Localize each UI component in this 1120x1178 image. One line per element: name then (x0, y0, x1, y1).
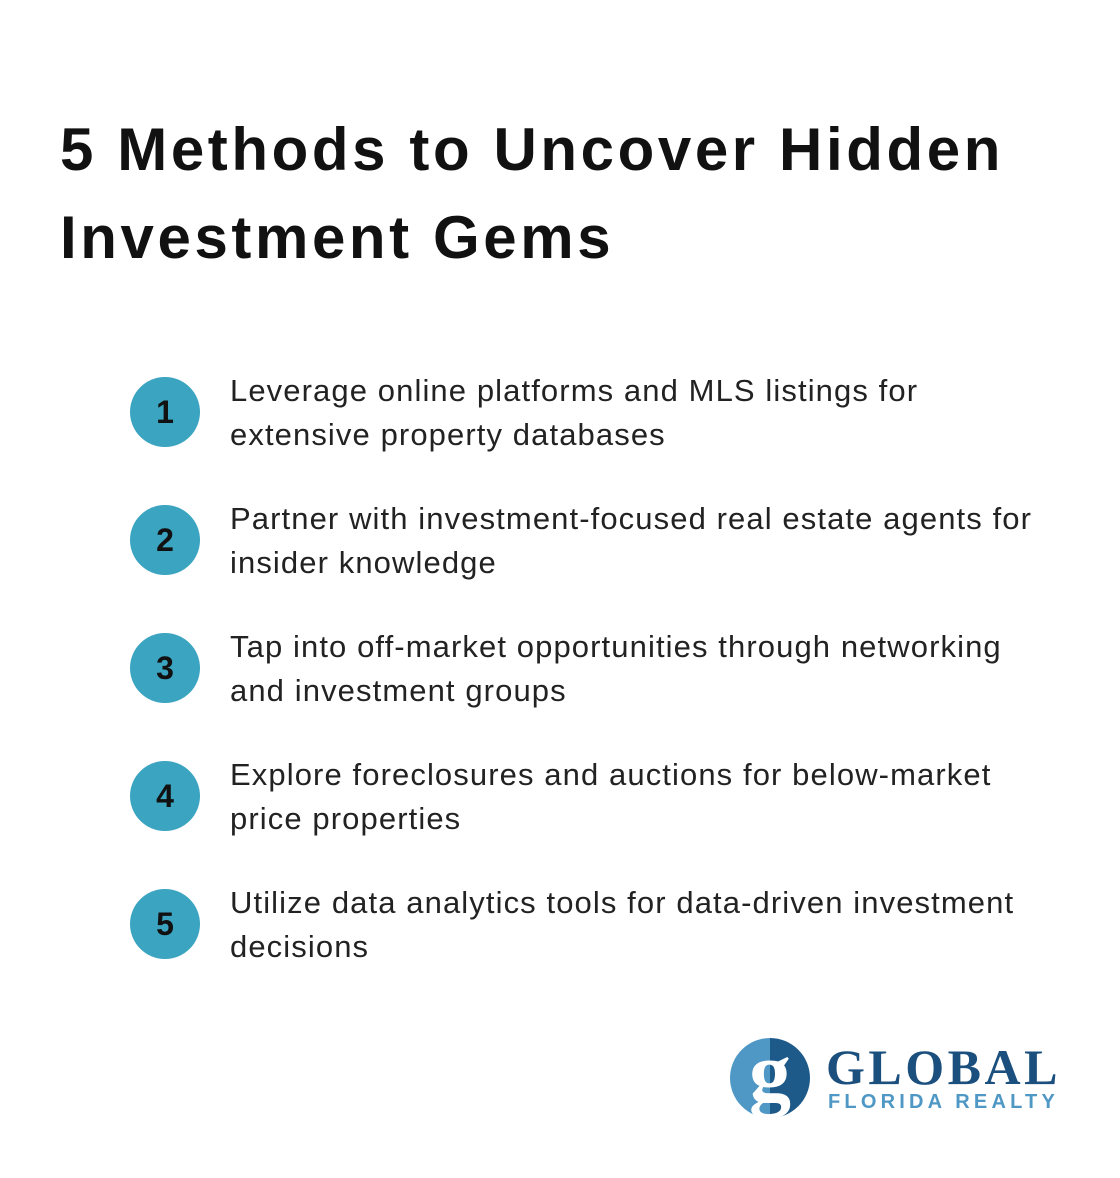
item 2: 2 (156, 522, 174, 558)
logo (730, 1026, 1061, 1119)
item 3 (130, 629, 1002, 708)
item 4: price properties (230, 801, 461, 836)
item 5: 5 (156, 906, 174, 942)
item 1: extensive property databases (230, 417, 666, 452)
item 3: and investment groups (230, 673, 567, 708)
item 2 (130, 501, 1032, 580)
item 3: 3 (156, 650, 174, 686)
logo: FLORIDA REALTY (828, 1091, 1059, 1113)
logo text: GLOBAL (826, 1039, 1061, 1095)
icon: g circle (730, 1038, 810, 1118)
item 4: Explore foreclosures and auctions for below-market (230, 757, 991, 792)
item 5: decisions (230, 929, 369, 964)
item 1: Leverage online platforms and MLS listings for (230, 373, 918, 408)
title: Investment Gems (60, 204, 614, 271)
item 1: 1 (156, 394, 174, 430)
item 1 (130, 373, 918, 452)
item 4: 4 (156, 778, 174, 814)
title: 5 Methods to Uncover Hidden (60, 116, 1004, 183)
item 2: insider knowledge (230, 545, 497, 580)
item 5 (130, 885, 1014, 964)
item 5: Utilize data analytics tools for data-driven investment (230, 885, 1014, 920)
item 2: Partner with investment-focused real estate agents for (230, 501, 1032, 536)
item 4 (130, 757, 991, 836)
title (60, 116, 1004, 271)
icon: g circle: g (749, 1026, 791, 1119)
item 3: Tap into off-market opportunities through networking (230, 629, 1002, 664)
